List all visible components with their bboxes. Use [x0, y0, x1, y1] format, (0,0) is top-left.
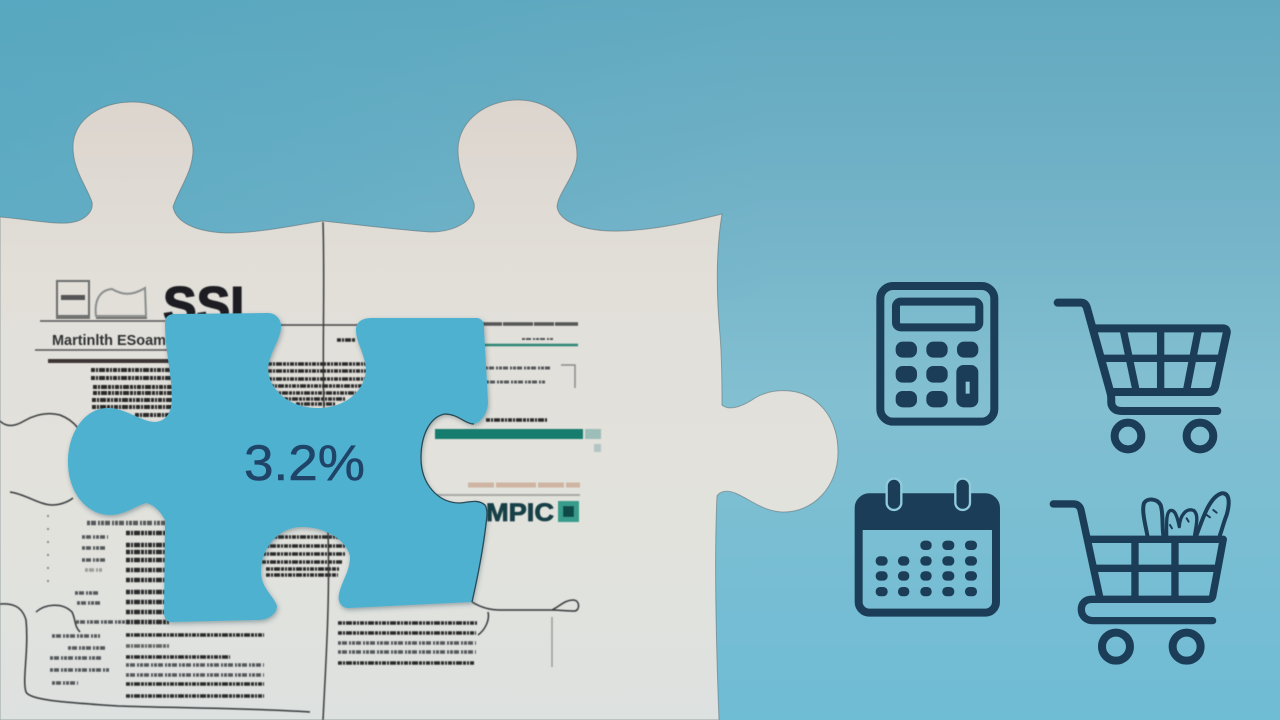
stat: 3.2%: 3.2%	[244, 435, 365, 491]
text block: lower left column	[87, 523, 170, 622]
text block: teal code row: MPIC	[486, 499, 554, 527]
text block: orange rule	[468, 482, 580, 488]
document heading	[52, 277, 261, 349]
text block: bottom right	[338, 623, 478, 663]
icon: calculator	[880, 286, 994, 422]
text block: bottom left labels	[50, 636, 110, 683]
text block: lower left labels	[48, 515, 125, 622]
panel: blue puzzle piece	[68, 313, 488, 622]
document heading: Martinlth ESoam	[52, 332, 166, 349]
text block: teal code row	[486, 499, 579, 527]
text block: right upper	[482, 324, 578, 420]
document icons	[56, 281, 147, 318]
panel: printed document on the puzzle	[0, 222, 601, 720]
icon: calendar	[859, 479, 996, 613]
panel: white jigsaw puzzle	[0, 100, 838, 720]
icon: shopping cart	[1058, 303, 1227, 449]
text block: upper notch	[268, 340, 366, 404]
blue piece outline at right notch	[421, 414, 487, 602]
text block: upper left column	[91, 370, 172, 415]
text block: lower notch	[262, 537, 345, 575]
icon: shopping cart with groceries	[1053, 493, 1229, 661]
document heading: SSL	[163, 277, 261, 335]
bar: teal progress	[435, 429, 601, 452]
puzzle cut lines	[0, 414, 579, 712]
text block: bottom columns	[126, 635, 264, 696]
